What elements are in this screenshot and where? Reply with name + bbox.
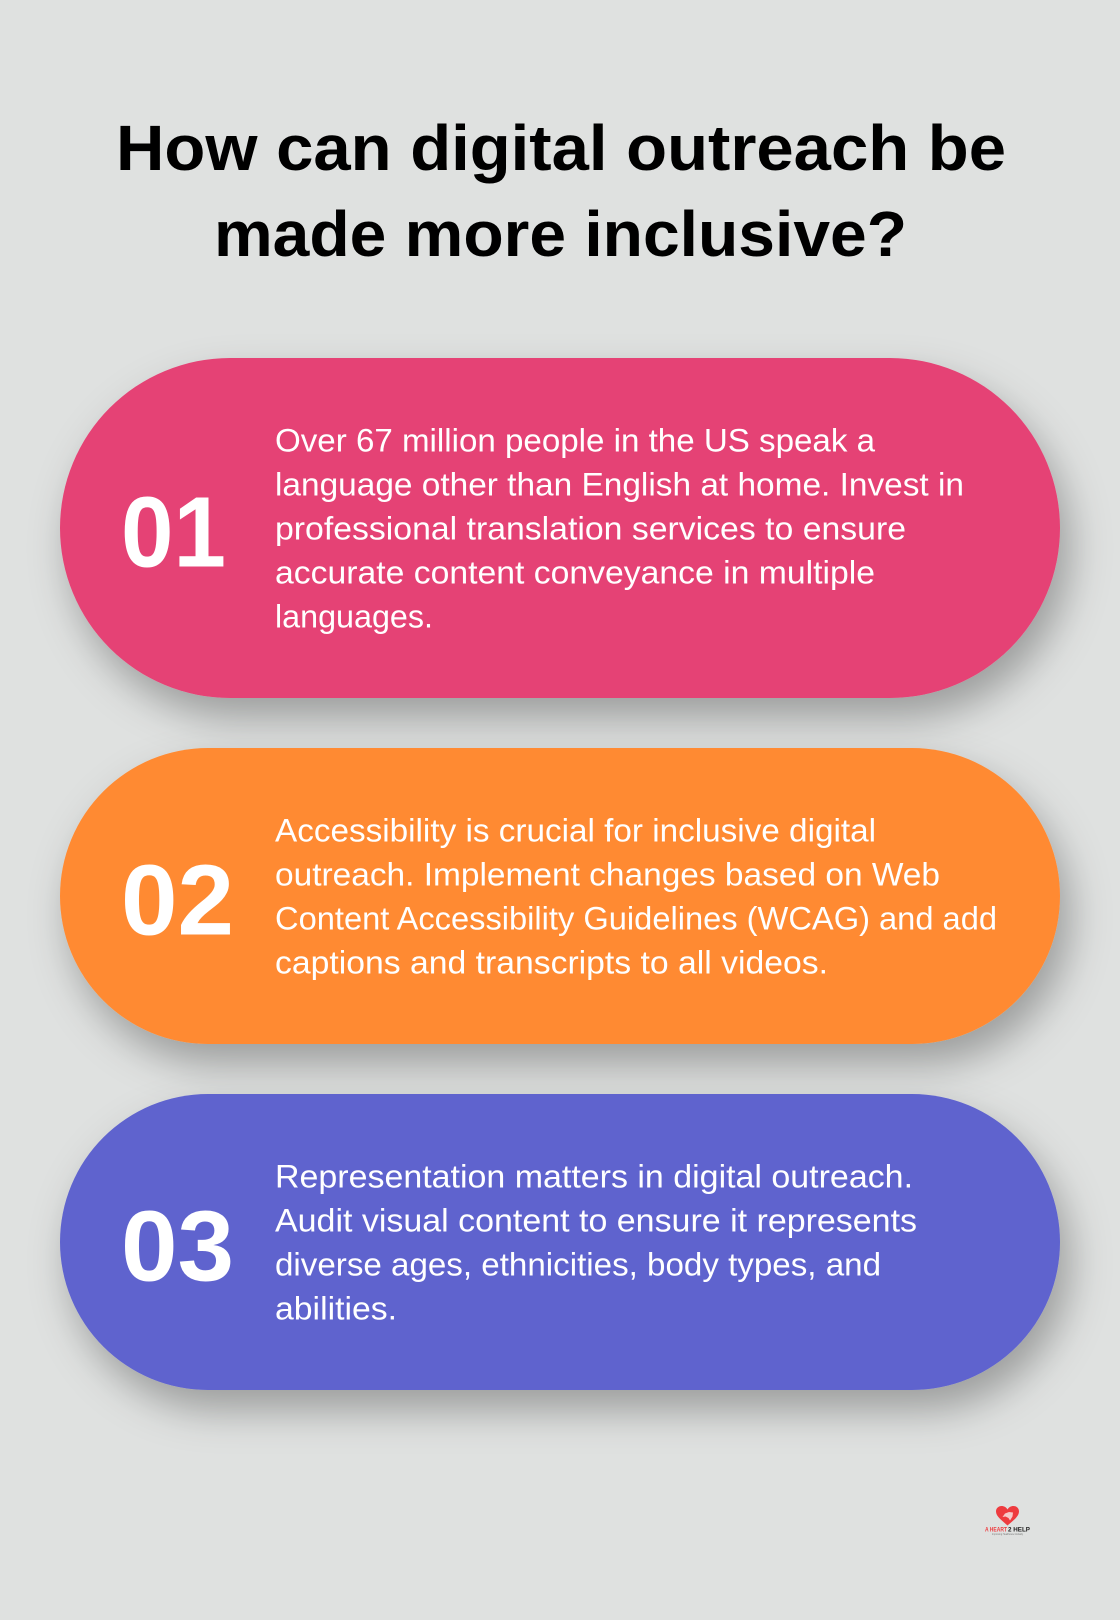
purple pill background	[60, 1094, 1060, 1390]
icon: heart with hands	[996, 1506, 1019, 1526]
logo wordmark: A HEART	[985, 1526, 1007, 1534]
text block: step 02: captions and transcripts to all videos.	[275, 945, 828, 981]
panel: step 03	[60, 1094, 1060, 1390]
text block: step 01: professional translation services to ensure	[275, 511, 906, 547]
number 01: 01	[121, 477, 226, 589]
text block: step 02: Accessibility is crucial for inclusive digital	[275, 813, 876, 849]
text block: step 03: diverse ages, ethnicities, body types, and	[275, 1247, 881, 1283]
panel: step 02	[60, 748, 1060, 1044]
title	[116, 112, 1006, 270]
text block: step 01	[275, 423, 964, 635]
number 02: 02	[121, 845, 234, 957]
panel: step 01	[60, 358, 1060, 698]
text block: step 03: abilities.	[275, 1291, 397, 1327]
logo: A Heart 2 Help	[985, 1506, 1031, 1536]
text block: step 03	[275, 1159, 917, 1327]
text block: step 01: Over 67 million people in the US speak a	[275, 423, 875, 459]
text block: step 02: outreach. Implement changes based on Web	[275, 857, 940, 893]
text block: step 01: languages.	[275, 599, 433, 635]
title: How can digital outreach be	[116, 112, 1006, 184]
text block: step 02: Content Accessibility Guidelines (WCAG) and add	[275, 901, 997, 937]
text block: step 03: Audit visual content to ensure it represents	[275, 1203, 917, 1239]
logo tagline: Improving Healthcare Globally	[992, 1533, 1024, 1536]
number 03: 03	[121, 1191, 234, 1303]
text block: step 03: Representation matters in digital outreach.	[275, 1159, 913, 1195]
text block: step 01: language other than English at home. Invest in	[275, 467, 964, 503]
text block: step 02	[275, 813, 997, 981]
logo: A Heart 2 Help: 2 HELP	[1008, 1526, 1031, 1534]
title: made more inclusive?	[214, 198, 907, 270]
pink pill background	[60, 358, 1060, 698]
text block: step 01: accurate content conveyance in multiple	[275, 555, 875, 591]
orange pill background	[60, 748, 1060, 1044]
